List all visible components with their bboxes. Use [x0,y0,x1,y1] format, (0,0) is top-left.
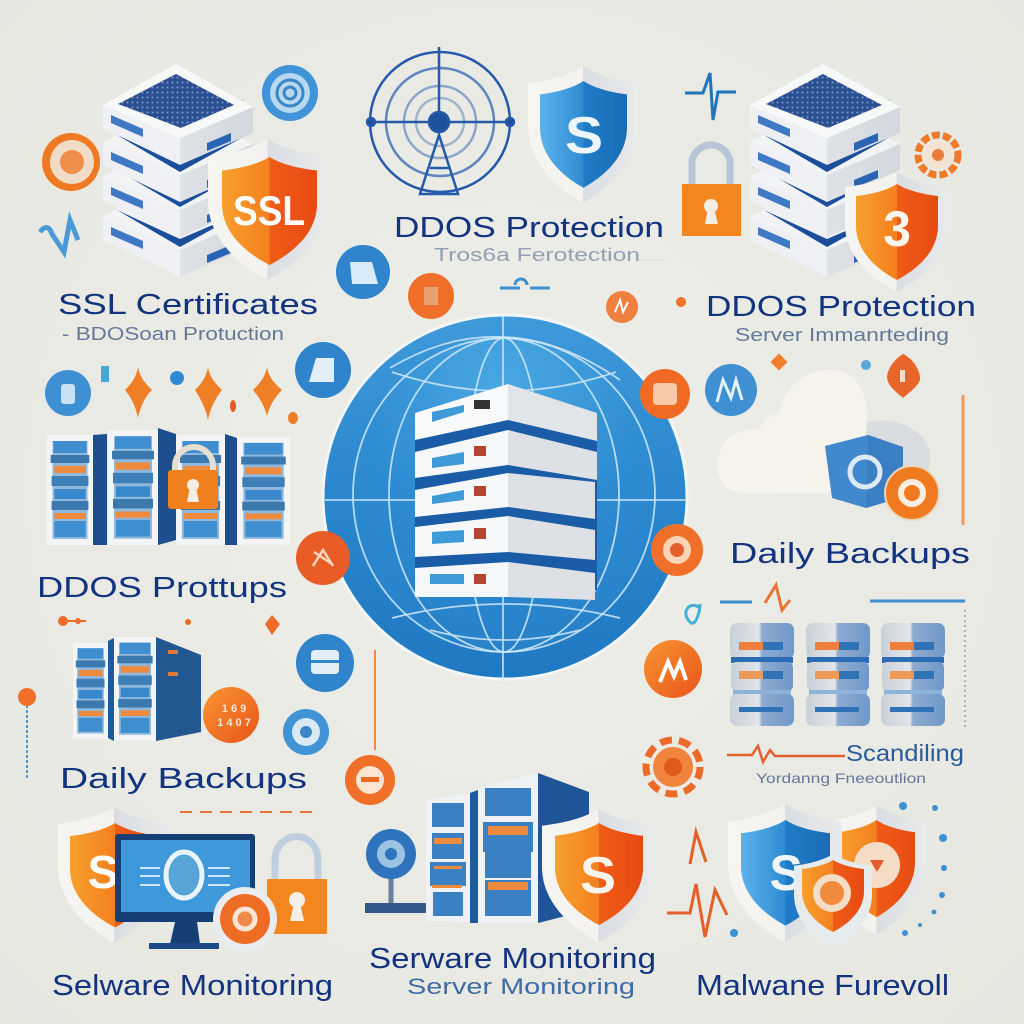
icon: blue shield [728,804,842,942]
icon: monitor [115,834,255,949]
icon: pulse splash [40,220,78,252]
icon: server stack [750,64,900,277]
icon: padlock [267,836,327,934]
icon: gear badge [918,135,958,175]
icon: shield 3: 3 [883,201,911,257]
icon: SSL shield: SSL [233,187,305,234]
decoration: blue dots [730,802,947,937]
icon: orange dot [18,688,36,706]
icon: M badge [705,364,757,416]
icon: orange spark [771,354,920,398]
icon: rack [73,637,201,741]
icon: orange shield [826,805,927,935]
icon: padlock [682,145,741,236]
icon: orange badge [885,466,939,520]
heading: Daily Backups: Daily Backups [60,763,307,795]
icon: badge [283,709,329,755]
icon: badge [408,273,454,319]
caption: Tros6a Ferotection [434,245,640,265]
wave [180,811,315,813]
caption: Yordanng Fneeoutlion [756,770,926,786]
icon: activity badge [644,640,702,698]
icon: blue badge [295,342,351,398]
icon: shield: S [580,847,616,905]
icon: blue shield [528,66,638,203]
central globe with servers [296,315,703,680]
node [651,524,703,576]
icon: orange circle: 1 4 0 7 [217,717,251,729]
icon: orange circle: 1 6 9 [222,703,246,715]
node [640,369,690,419]
panel: cloud backup [686,354,970,623]
heading: Malwane Furevoll: Malwane Furevoll [696,970,949,1002]
icon: badge [336,245,390,299]
icon: virus gear [646,740,700,794]
icon: blue shield: S [769,845,803,901]
icon: small shield [794,854,872,948]
caption: - BDOSoan Protuction [62,324,284,344]
icon: blue box [825,435,903,508]
heading: Serware Monitoring: Serware Monitoring [369,943,656,975]
heading: DDOS Protection: DDOS Protection [394,212,664,244]
icon: blue shield: S [565,107,603,165]
icon: badge [606,291,638,323]
icon: shield [542,809,655,942]
icon: pulse [685,73,736,120]
panel: databases [644,610,965,794]
wave [727,746,845,762]
icon: back cloud [850,420,930,485]
heading: Selware Monitoring: Selware Monitoring [52,970,333,1002]
icon: pulse [667,832,727,937]
icon: fingerprint badge [262,65,318,121]
globe [323,315,687,680]
node [296,531,350,585]
icon: racks [426,773,589,923]
icon: badges [296,634,354,692]
decoration: orange beads [58,615,280,635]
heading: Scandiling: Scandiling [846,740,964,766]
panel: DDOS top centre [367,47,664,265]
icon: padlock [168,447,218,509]
icon: blue badge [45,370,91,416]
icon: databases [730,623,945,726]
icon: orange circle [203,687,259,743]
wave accents [686,585,965,623]
icon: server racks [47,428,290,545]
panel: shield and monitor [52,807,333,1002]
icon: SSL shield [208,139,327,280]
panel: racks with lock [37,342,351,635]
icon: small dot [676,297,686,307]
central server stack [415,384,597,600]
panel: DDOS top right [676,64,976,345]
icon: radar antenna [367,47,514,194]
panel: daily backups left [18,634,354,795]
icon: shield [58,807,170,943]
icon: cloud [717,370,867,493]
heading: DDOS Prottups: DDOS Prottups [37,572,287,604]
caption: Server Immanrteding [735,325,949,345]
panel: server monitoring [365,773,656,999]
decoration: wave [500,279,550,288]
icon: server stack [103,64,253,277]
icon: shield: S [88,846,118,898]
icon: shield 3 [845,172,948,292]
heading: DDOS Protection: DDOS Protection [706,291,976,323]
icon: orange sparks [101,366,298,424]
small connectors and accents [336,245,665,323]
heading: Daily Backups: Daily Backups [730,538,970,570]
caption: Server Monitoring [407,974,635,999]
panel: SSL certificates [40,64,327,344]
heading: SSL Certificates: SSL Certificates [58,289,318,321]
icon: webcam [365,829,427,913]
icon: orange badge [213,887,277,951]
icon: orange badge [42,133,100,191]
node: orange ring [345,650,395,805]
panel: malware firewall [667,802,949,1002]
